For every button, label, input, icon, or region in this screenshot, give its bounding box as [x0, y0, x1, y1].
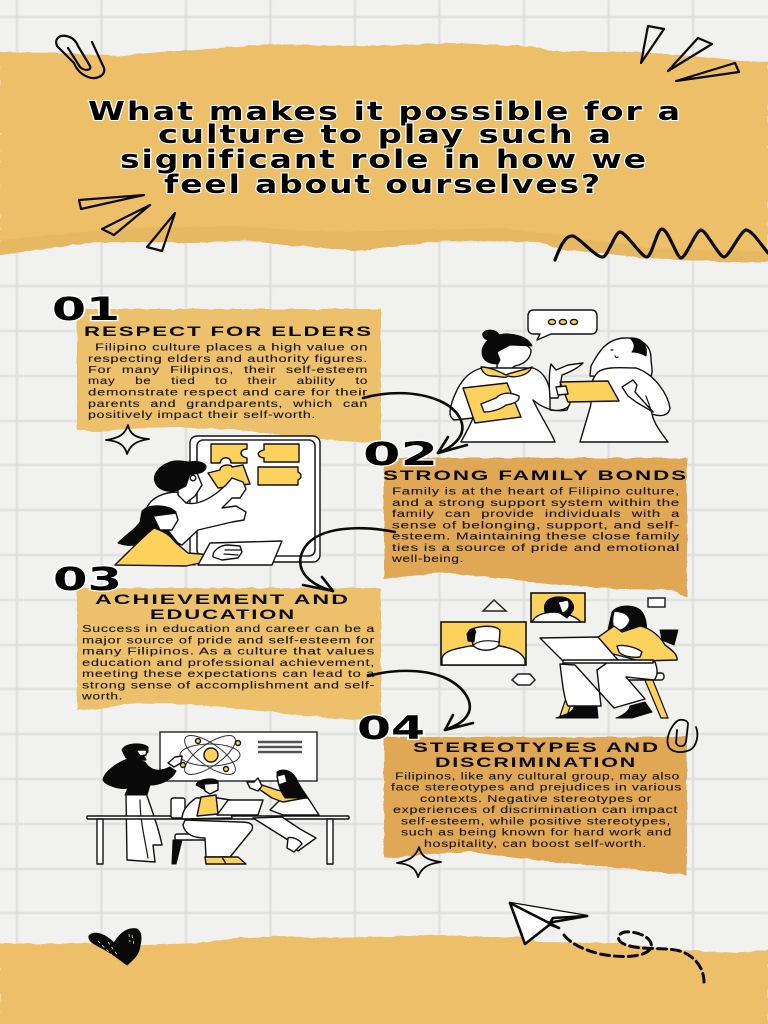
icon: paperclip top — [56, 36, 104, 78]
body text: family can provide individuals with a — [392, 508, 680, 520]
body text: hospitality, can boost self-worth. — [424, 838, 647, 850]
icon: paperclip panel 4 — [667, 720, 697, 752]
body text: Filipinos, like any cultural group, may also — [395, 770, 680, 782]
title: What makes it possible for a — [88, 97, 682, 127]
body text: many Filipinos. As a culture that values — [82, 646, 375, 658]
bottom torn paper banner — [0, 935, 768, 1024]
icon: burst spikes top right — [641, 26, 739, 81]
shape: square — [648, 598, 665, 607]
video tile: man with headset — [441, 622, 526, 665]
icon: black heart — [89, 929, 141, 965]
illustration: puzzle board with two people — [115, 436, 320, 566]
body text: education and professional achievement, — [82, 657, 375, 669]
heading: STRONG FAMILY BONDS — [383, 467, 688, 483]
heading — [413, 739, 660, 770]
heading: EDUCATION — [150, 606, 296, 622]
hair — [608, 606, 648, 638]
illustration: science lesson at table — [87, 729, 349, 864]
heading: ACHIEVEMENT AND — [95, 591, 350, 607]
panel paper — [77, 309, 381, 443]
puzzle pieces — [208, 444, 301, 488]
right woman — [580, 338, 670, 442]
body text: experiences of discrimination can impact — [393, 804, 678, 816]
woman at laptop — [115, 506, 282, 566]
icon: paper airplane — [510, 903, 587, 944]
panel: achievement and education — [53, 560, 381, 720]
yellow sweater — [597, 626, 677, 661]
body text: strong sense of accomplishment and self- — [82, 680, 375, 692]
chair — [660, 630, 678, 645]
panel paper — [384, 737, 687, 875]
body text — [391, 770, 682, 850]
heading — [95, 591, 350, 622]
body text: Filipino culture places a high value on — [95, 342, 368, 354]
top torn paper banner — [0, 43, 768, 262]
icon: burst spikes lower left — [79, 195, 175, 251]
arrow: panel 1 to panel 2 — [363, 393, 467, 453]
video tile: woman — [531, 593, 585, 622]
body text: may be tied to their ability to — [88, 375, 368, 387]
woman at right — [247, 770, 319, 852]
body text: ties is a source of pride and emotional — [392, 542, 680, 554]
title — [88, 97, 682, 200]
body text: demonstrate respect and care for their — [88, 386, 368, 398]
yellow tablet — [560, 381, 619, 402]
pants — [560, 660, 657, 708]
icon: zigzag line — [555, 229, 768, 260]
body text: contexts. Negative stereotypes or — [420, 793, 652, 805]
body text: parents and grandparents, which can — [88, 398, 368, 410]
number 04: 04 — [357, 709, 425, 747]
body text: For many Filipinos, their self-esteem — [88, 364, 368, 376]
body text: well-being. — [391, 553, 464, 565]
body text: respecting elders and authority figures. — [88, 353, 368, 365]
body text: Success in education and career can be a — [82, 623, 375, 635]
panel: respect for elders — [52, 290, 381, 443]
speech bubble — [528, 310, 597, 340]
heading: STEREOTYPES AND — [413, 739, 660, 755]
heading: RESPECT FOR ELDERS — [84, 323, 373, 339]
body text: face stereotypes and prejudices in various — [391, 782, 682, 794]
number 02: 02 — [363, 435, 438, 473]
title: significant role in how we — [120, 145, 648, 175]
whiteboard — [160, 729, 317, 781]
panel paper — [384, 458, 687, 597]
seated man with laptop — [171, 779, 263, 864]
table top — [87, 816, 349, 819]
number 03: 03 — [53, 560, 122, 598]
title: culture to play such a — [158, 120, 613, 150]
body text: and a strong support system within the — [392, 497, 680, 509]
body text: meeting these expectations can lead to a — [82, 668, 375, 680]
illustration: two women talking — [450, 310, 670, 442]
arrow: panel 2 to panel 3 — [300, 528, 395, 591]
icon: sparkle star near panel 1 — [106, 425, 149, 454]
body text: sense of belonging, support, and self- — [392, 520, 680, 532]
icon: sparkle star near panel 4 — [397, 847, 441, 877]
body text: esteem. Maintaining these close family — [392, 530, 680, 542]
illustration: video call — [441, 593, 678, 718]
table legs — [97, 819, 333, 864]
standing man — [103, 744, 182, 862]
panel paper — [77, 588, 381, 720]
panel: strong family bonds — [363, 435, 688, 597]
laptop — [540, 637, 618, 661]
body text: Family is at the heart of Filipino culture, — [392, 486, 680, 498]
body text: self-esteem, while positive stereotypes, — [401, 816, 671, 828]
body text: worth. — [81, 690, 123, 702]
yellow folder — [463, 383, 521, 423]
shape: hexagon — [512, 674, 535, 685]
arrow: panel 3 to panel 4 — [368, 671, 473, 730]
shape: triangle — [483, 600, 506, 611]
body text — [88, 342, 368, 421]
body text — [391, 486, 680, 565]
seated woman with laptop — [540, 606, 678, 718]
body text: such as being known for hard work and — [401, 826, 672, 838]
body text — [81, 623, 375, 702]
panel: stereotypes and discrimination — [357, 709, 687, 875]
board — [190, 436, 320, 562]
dashed flight path — [564, 932, 704, 982]
number 01: 01 — [52, 290, 120, 328]
left woman — [450, 330, 619, 442]
body text: positively impact their self-worth. — [88, 409, 316, 421]
woman with glasses — [146, 461, 246, 545]
shoes — [556, 707, 598, 718]
body text: major source of pride and self-esteem for — [82, 634, 375, 646]
heading: DISCRIMINATION — [435, 754, 637, 770]
title: feel about ourselves? — [164, 170, 602, 200]
